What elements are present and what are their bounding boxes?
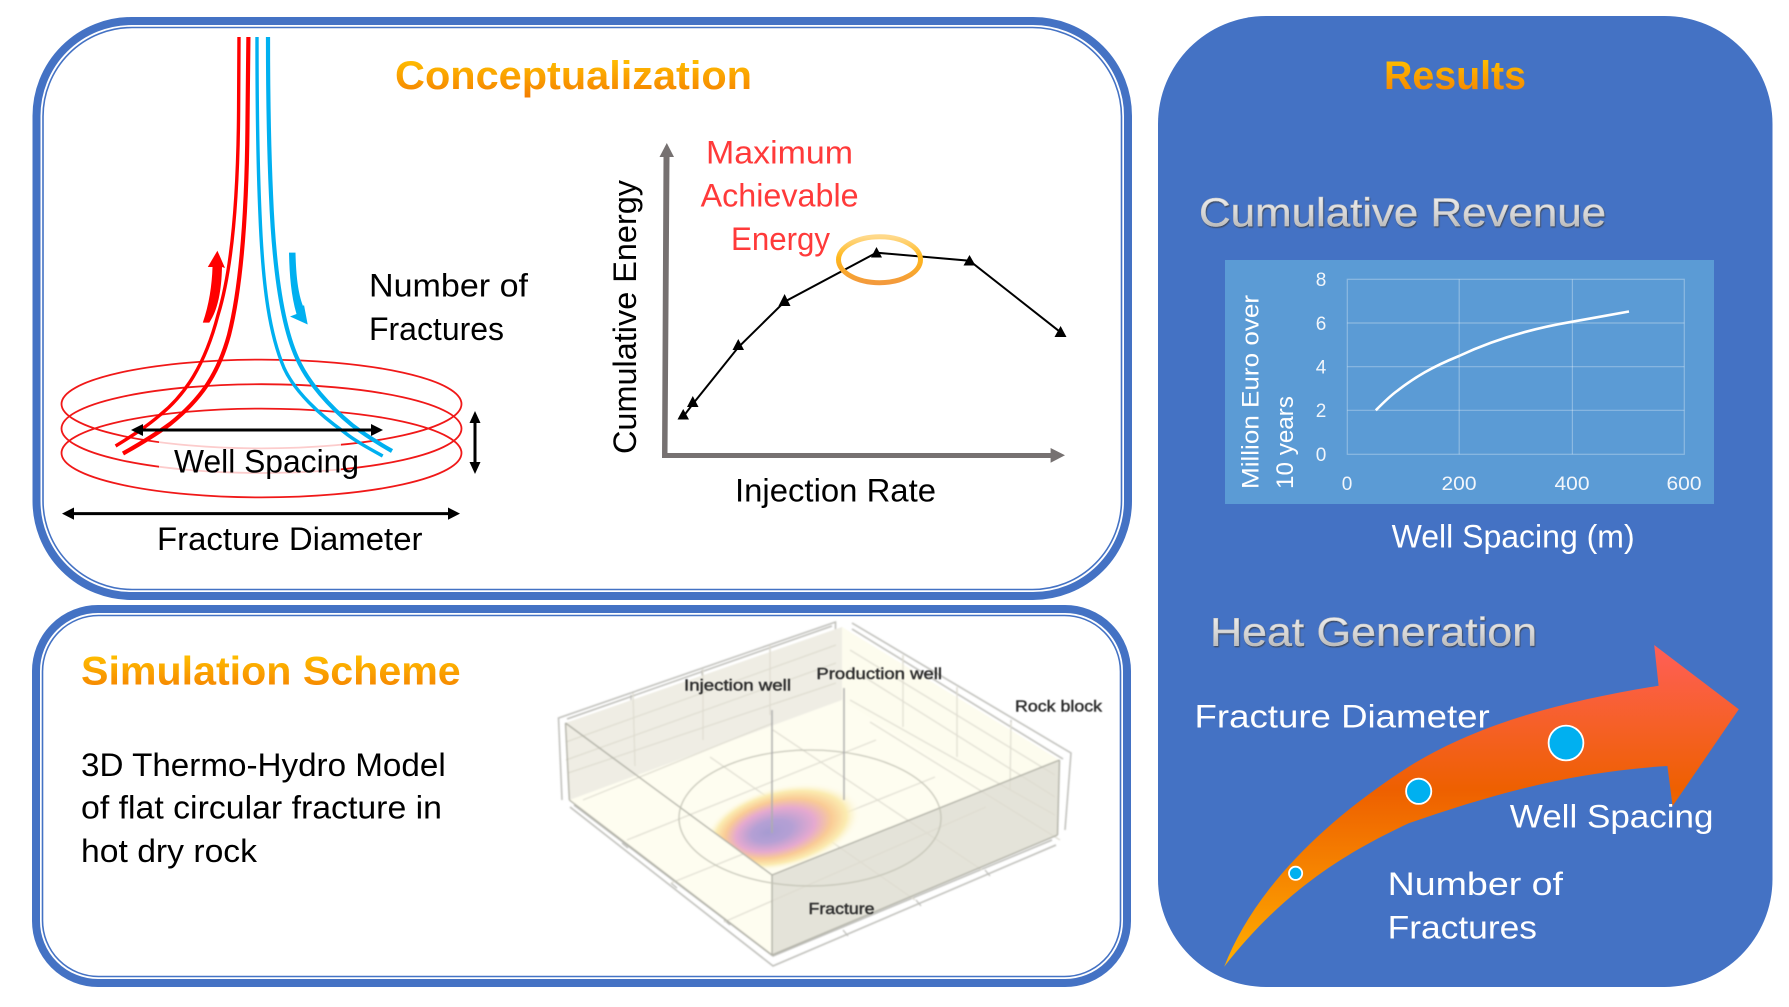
x axis label: Injection Rate — [735, 473, 936, 509]
label: well spacing: Well Spacing — [174, 444, 359, 480]
y axis label: Cumulative Energy — [607, 180, 643, 454]
revenue curve — [1376, 312, 1629, 410]
text block: model description — [81, 747, 446, 869]
arrow: fracture separation — [470, 411, 480, 474]
label: maximum achievable energy: Maximum — [706, 134, 853, 170]
label: well spacing: Well Spacing — [1510, 799, 1714, 835]
diagram: wells and fractures — [62, 37, 528, 557]
label: maximum achievable energy: Achievable — [701, 178, 859, 214]
back right wall — [842, 627, 1060, 835]
3D model of rock block — [558, 622, 1103, 966]
highlight ring — [838, 237, 920, 283]
text block: model description: 3D Thermo-Hydro Model — [81, 747, 446, 783]
injection well pipes — [257, 37, 392, 456]
well lines — [772, 688, 844, 833]
y axis ticks: 4 — [1316, 357, 1327, 378]
y axis label: Million Euro over — [1237, 295, 1264, 489]
label: maximum achievable energy: Energy — [731, 221, 830, 257]
block edges — [566, 723, 1060, 955]
grid lines — [1347, 279, 1684, 454]
curved arrow: heat generation — [1224, 645, 1739, 967]
y axis label: 10 years — [1272, 396, 1299, 489]
label: fracture diameter: Fracture Diameter — [1194, 699, 1490, 735]
heading: Results: Results — [1384, 54, 1526, 98]
arrow: fracture diameter — [62, 508, 460, 520]
model labels: Production well — [816, 666, 942, 683]
heading: Heat Generation: Heat Generation — [1210, 610, 1537, 654]
heading: Simulation Scheme: Simulation Scheme — [81, 650, 461, 694]
model labels: Rock block — [1015, 699, 1103, 716]
label: maximum achievable energy — [701, 134, 859, 257]
x axis label: Well Spacing (m) — [1392, 518, 1635, 554]
model labels: Injection well — [684, 678, 791, 695]
fracture discs — [62, 360, 462, 497]
label: number of fractures: Number of — [1388, 866, 1563, 902]
text block: model description: hot dry rock — [81, 833, 258, 869]
heading: Conceptualization: Conceptualization — [395, 54, 752, 98]
label: number of fractures — [369, 268, 528, 347]
chart: cumulative revenue — [1225, 260, 1714, 504]
y axis ticks: 6 — [1316, 314, 1326, 335]
fracture circle — [679, 750, 941, 886]
heading: Cumulative Revenue: Cumulative Revenue — [1199, 191, 1606, 235]
x axis ticks: 0 — [1342, 474, 1352, 495]
arrow: production flow up — [203, 251, 225, 323]
y axis ticks: 0 — [1316, 445, 1326, 466]
label: number of fractures: Fractures — [369, 311, 504, 347]
y axis label — [1237, 295, 1299, 489]
panel: results — [1158, 16, 1772, 987]
marker: fracture diameter — [1406, 779, 1431, 804]
arrow: injection flow down — [289, 253, 308, 324]
x axis ticks: 400 — [1554, 474, 1590, 495]
outer frame — [558, 622, 1071, 966]
label: fracture diameter: Fracture Diameter — [157, 521, 423, 557]
panel: conceptualization — [36, 21, 1128, 596]
chart: cumulative energy vs injection rate — [607, 134, 1066, 509]
model labels — [684, 666, 1103, 918]
marker: number of fractures — [1289, 867, 1302, 880]
heat plume — [712, 786, 856, 869]
y axis ticks — [1316, 270, 1327, 466]
label: number of fractures — [1388, 866, 1563, 945]
x axis ticks: 200 — [1442, 474, 1476, 495]
text block: model description: of flat circular fracture in — [81, 790, 442, 826]
production well pipes — [116, 37, 248, 454]
block body — [566, 627, 1060, 955]
label: number of fractures: Number of — [369, 268, 528, 304]
grid lines — [566, 645, 1060, 922]
series line — [678, 247, 1066, 420]
x axis ticks — [1342, 474, 1702, 495]
y axis ticks: 8 — [1316, 270, 1326, 291]
axes — [660, 143, 1065, 463]
y axis ticks: 2 — [1316, 401, 1326, 422]
panel: simulation scheme — [36, 609, 1127, 983]
label: number of fractures: Fractures — [1388, 909, 1537, 945]
arrow: well spacing — [131, 424, 383, 436]
marker: well spacing — [1549, 726, 1583, 760]
front right face — [772, 760, 1060, 955]
x axis ticks: 600 — [1666, 474, 1702, 495]
model labels: Fracture — [808, 901, 875, 918]
back left wall — [566, 627, 842, 800]
